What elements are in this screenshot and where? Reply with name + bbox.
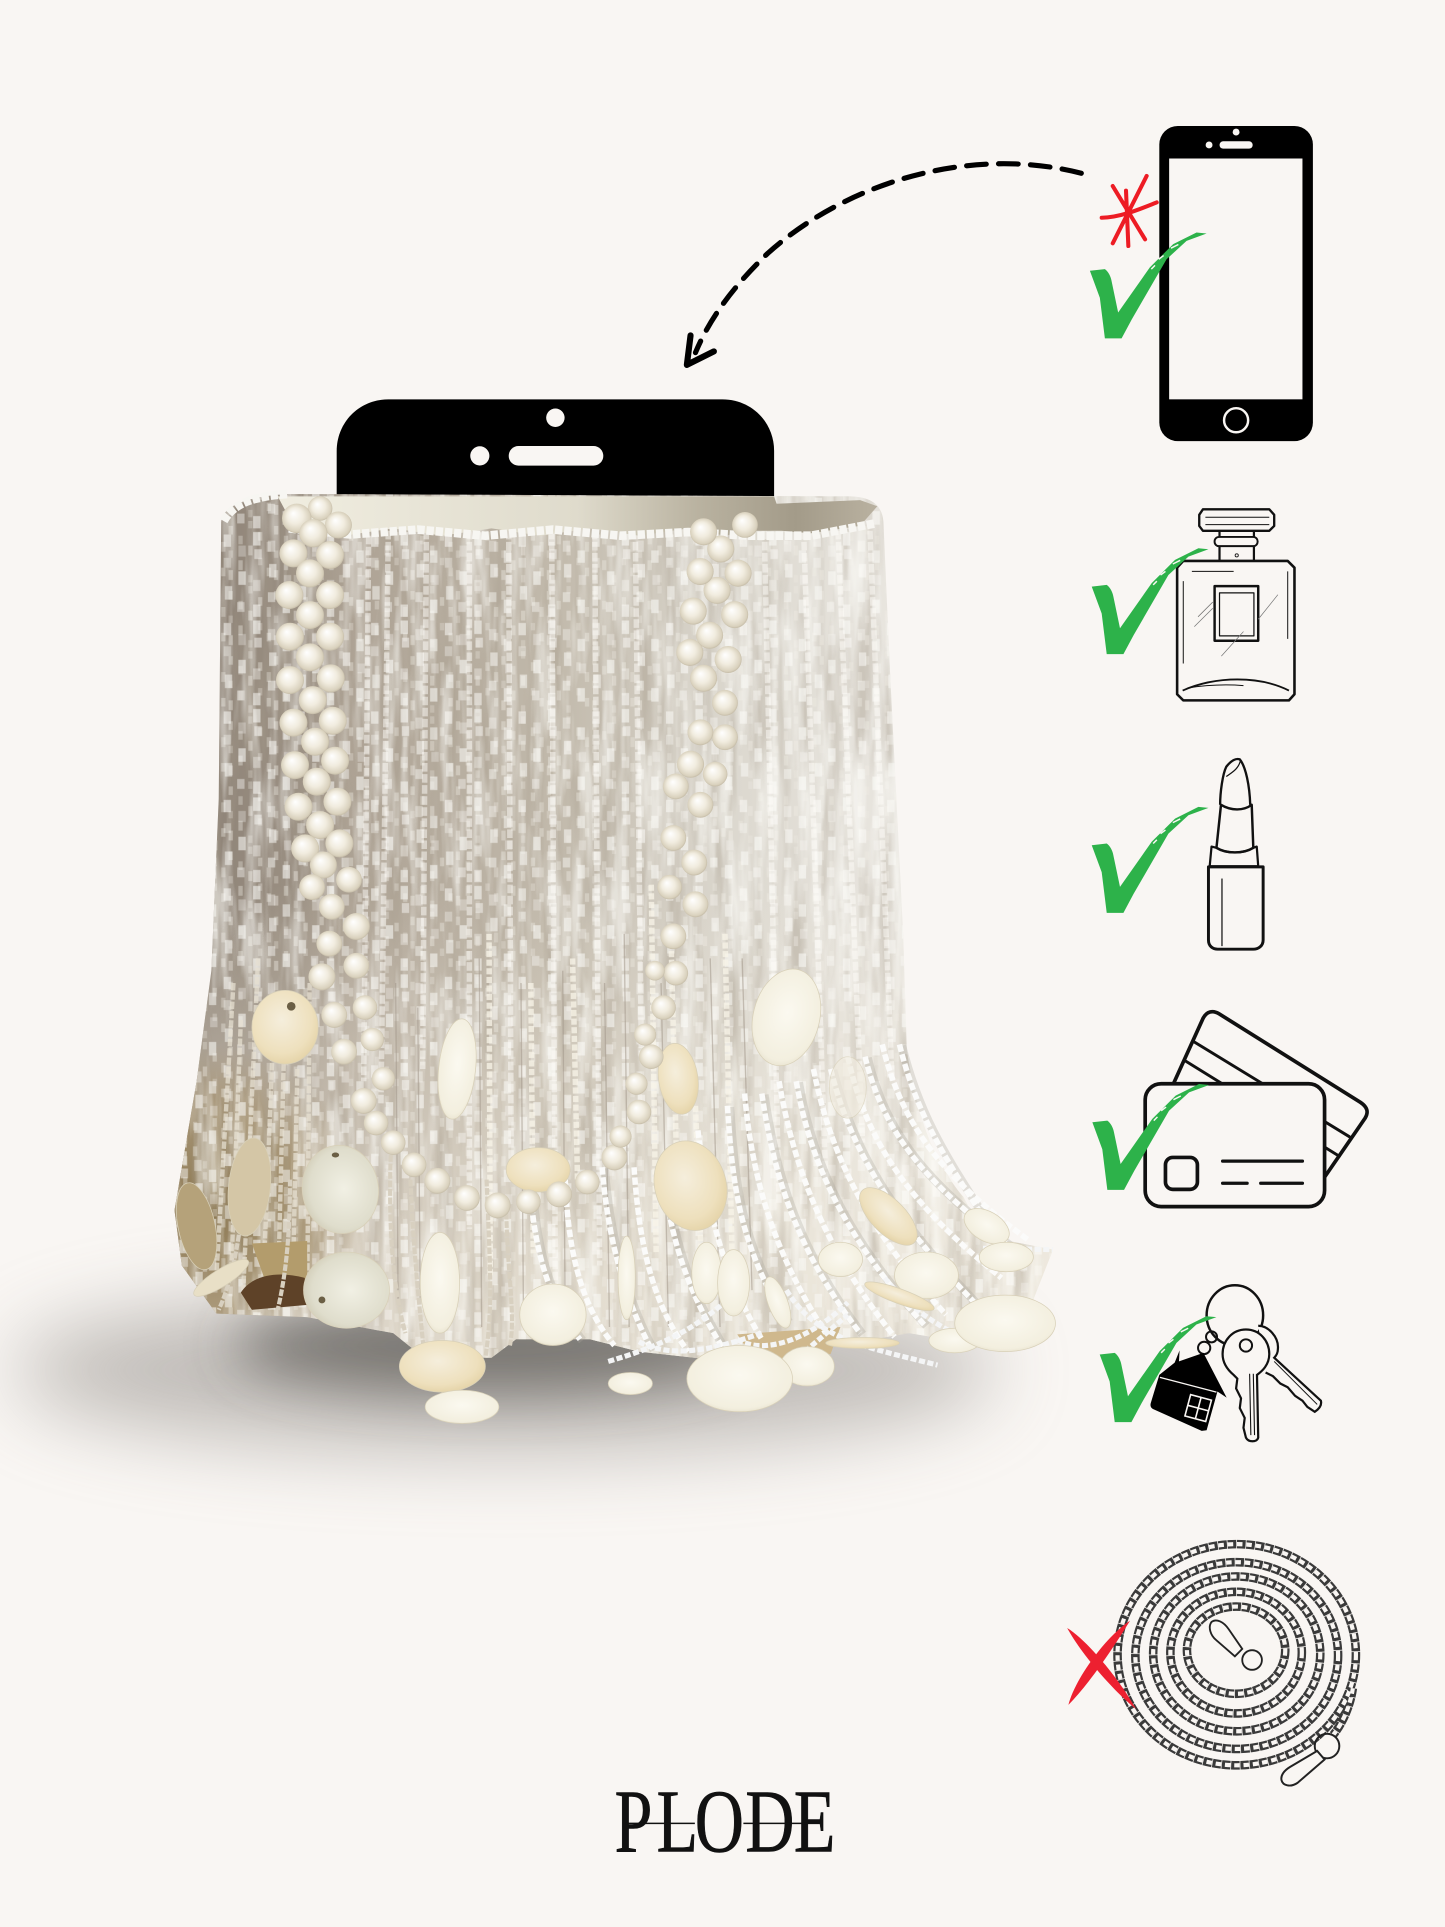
cards item (1092, 1012, 1367, 1207)
keys item (1100, 1285, 1321, 1441)
PLODE logo: PLODE (614, 1773, 835, 1872)
icon: green check mark (1092, 548, 1208, 654)
mother-of-pearl shell discs (169, 962, 1055, 1423)
perfume item (1092, 509, 1294, 700)
icon: green check mark (1100, 1316, 1216, 1422)
second key (1258, 1326, 1321, 1412)
fringe strands (219, 1044, 1053, 1365)
icon: green check mark (1092, 1084, 1209, 1190)
fringe strand shading (531, 1046, 1022, 1353)
bag body with bead texture (160, 485, 1069, 1382)
shell drill holes (287, 1002, 339, 1303)
bag inner rim lining (278, 496, 877, 536)
first key (1223, 1329, 1269, 1441)
dark base patches under the fringe (241, 1241, 840, 1361)
icon: coiled metal chain with clasps (1118, 1544, 1356, 1786)
dashed arrow from the phone to the bag (687, 164, 1081, 365)
lipstick item (1092, 759, 1263, 949)
inner clasp (1210, 1620, 1262, 1670)
icon: green check mark (1090, 232, 1207, 338)
outer clasp (1281, 1734, 1339, 1786)
icon: lipstick (1208, 759, 1263, 949)
bag ground shadow (12, 1289, 995, 1451)
icon: large phone sticking out of the bag (337, 399, 774, 565)
icon: phone (1159, 126, 1313, 441)
small phone item (1090, 126, 1313, 441)
icon: keyring with house fob and keys (1150, 1285, 1321, 1441)
house fob (1150, 1350, 1227, 1431)
icon: credit cards (1145, 1012, 1367, 1207)
pearl necklace (275, 496, 758, 1218)
icon: perfume bottle (1177, 509, 1294, 700)
icon: red cross mark (1067, 1621, 1136, 1709)
beaded bag (160, 485, 1069, 1423)
chain item (1067, 1544, 1356, 1786)
arrowhead (687, 335, 714, 365)
icon: green check mark (1092, 807, 1208, 913)
rim bead edge (224, 494, 875, 536)
icon: red asterisk note (1102, 176, 1157, 246)
